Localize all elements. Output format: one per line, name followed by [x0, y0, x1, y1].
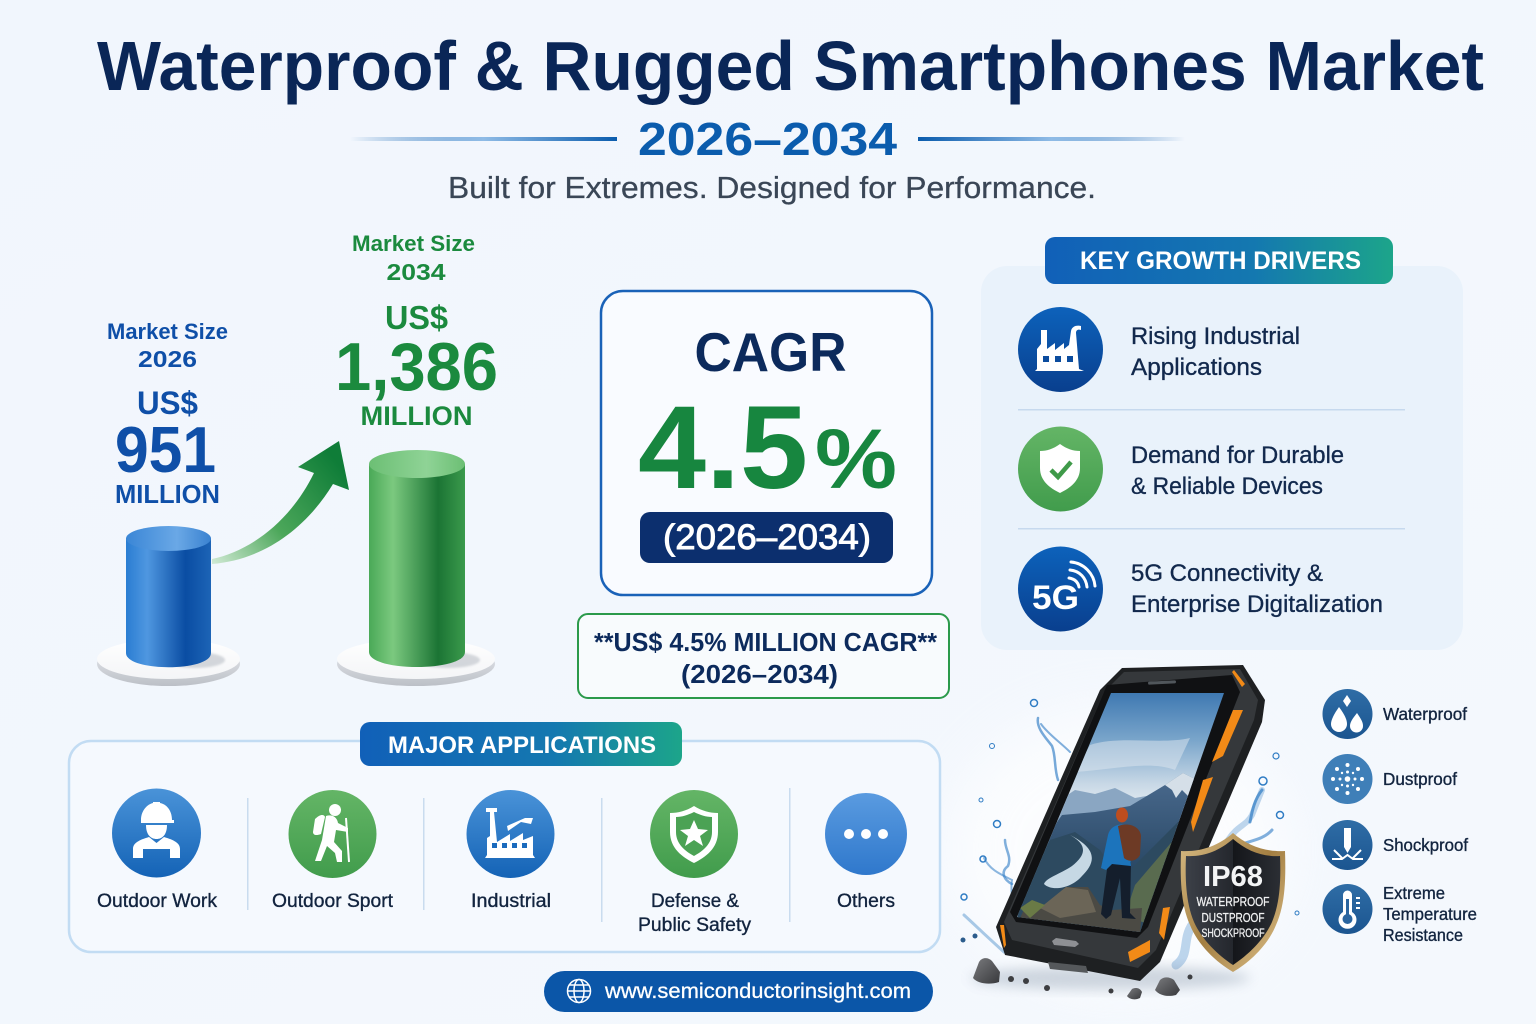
icon: industrial [466, 790, 554, 878]
text: rising industrial applications: Applications [1131, 354, 1262, 381]
market size 2026 label: 2026 [138, 346, 197, 372]
icon: dustproof [1322, 754, 1372, 804]
text: 5G connectivity: Enterprise Digitalization [1131, 591, 1383, 618]
label: outdoor work: Outdoor Work [97, 890, 217, 912]
label: outdoor sport: Outdoor Sport [272, 890, 394, 912]
icon: temperature [1322, 884, 1372, 934]
subtitle years with rules: 2026–2034 [638, 113, 897, 165]
icon: outdoor sport [288, 790, 376, 878]
green cylinder 2034 [337, 450, 495, 686]
icon: globe [568, 980, 590, 1002]
ground shadow [970, 966, 1250, 990]
label: shockproof: Shockproof [1383, 835, 1468, 855]
heading: key growth drivers: KEY GROWTH DRIVERS [1080, 247, 1361, 275]
badge: IP68 shield: DUSTPROOF [1202, 910, 1265, 925]
tagline: Built for Extremes. Designed for Performance. [448, 170, 1096, 205]
panel: CAGR: (2026–2034) [663, 518, 871, 557]
callout: CAGR note: **US$ 4.5% MILLION CAGR** [594, 627, 938, 657]
heading: major applications [360, 722, 682, 766]
text: rising industrial applications [1131, 323, 1300, 381]
heading: major applications: MAJOR APPLICATIONS [388, 732, 656, 759]
market size 2034 label: 1,386 [335, 329, 498, 405]
icon: shockproof [1322, 820, 1372, 870]
market size 2026 label: 951 [115, 413, 216, 486]
badge: IP68 shield: SHOCKPROOF [1202, 926, 1264, 940]
text: demand for durable devices: Demand for Durable [1131, 442, 1344, 469]
market size 2034 label [335, 231, 498, 431]
market size 2034 label: Market Size [352, 231, 475, 256]
text: demand for durable devices [1131, 442, 1344, 500]
panel: CAGR: 4.5 [638, 382, 808, 514]
badge: IP68 shield: IP68 [1203, 861, 1263, 893]
label: defense and public safety: Public Safety [638, 914, 751, 936]
icon: defense [650, 790, 738, 878]
market size 2026 label: MILLION [115, 479, 220, 509]
label: extreme temperature resistance [1383, 883, 1477, 945]
text: demand for durable devices: & Reliable Devices [1131, 473, 1323, 500]
market size 2026 label: US$ [137, 385, 198, 421]
text: rising industrial applications: Rising Industrial [1131, 323, 1300, 350]
panel: major applications [69, 722, 940, 952]
text: 5G connectivity: 5G Connectivity & [1131, 560, 1323, 587]
website pill: www.semiconductorinsight.com [604, 979, 911, 1003]
heading: key growth drivers [1045, 237, 1393, 284]
text: 5G connectivity [1131, 560, 1383, 618]
label: extreme temperature resistance: Temperature [1383, 904, 1477, 924]
market size 2026 label: Market Size [107, 319, 228, 344]
label: others: Others [837, 890, 895, 912]
website pill [544, 971, 933, 1012]
callout: CAGR note [578, 614, 949, 698]
label: dustproof: Dustproof [1383, 769, 1457, 789]
icon: shield check [1018, 426, 1103, 512]
panel: CAGR: CAGR [694, 321, 846, 383]
icon: factory [1018, 307, 1103, 392]
badge: IP68 shield [1181, 833, 1285, 972]
market size 2026 label [107, 319, 228, 509]
label: extreme temperature resistance: Resistance [1383, 925, 1463, 945]
badge: IP68 shield: WATERPROOF [1196, 894, 1270, 909]
icon: outdoor work [112, 788, 201, 878]
label: defense and public safety [638, 890, 751, 936]
callout: CAGR note: (2026–2034) [681, 659, 838, 689]
panel: CAGR: % [815, 412, 897, 506]
icon: 5G: 5G [1032, 579, 1079, 617]
blue cylinder 2026 [97, 526, 240, 686]
label: extreme temperature resistance: Extreme [1383, 883, 1445, 903]
label: industrial: Industrial [471, 890, 551, 912]
phone screen [1017, 693, 1224, 932]
growth arrow [212, 441, 349, 564]
phone [996, 665, 1265, 981]
panel: CAGR [601, 291, 932, 595]
icon: others [825, 793, 907, 875]
panel: key growth drivers [981, 237, 1463, 650]
label: defense and public safety: Defense & [651, 890, 739, 912]
icon: waterproof [1322, 689, 1372, 739]
market size 2034 label: 2034 [386, 259, 446, 285]
label: waterproof: Waterproof [1383, 704, 1467, 724]
icon: rocks [973, 958, 1192, 999]
hiker [1101, 808, 1141, 919]
water splashes [960, 700, 1299, 965]
icon: 5G [1018, 546, 1103, 632]
market size 2034 label: US$ [385, 299, 448, 336]
market size 2034 label: MILLION [360, 401, 472, 431]
title: Waterproof & Rugged Smartphones Market [97, 27, 1484, 105]
subtitle years with rules [350, 113, 1185, 165]
